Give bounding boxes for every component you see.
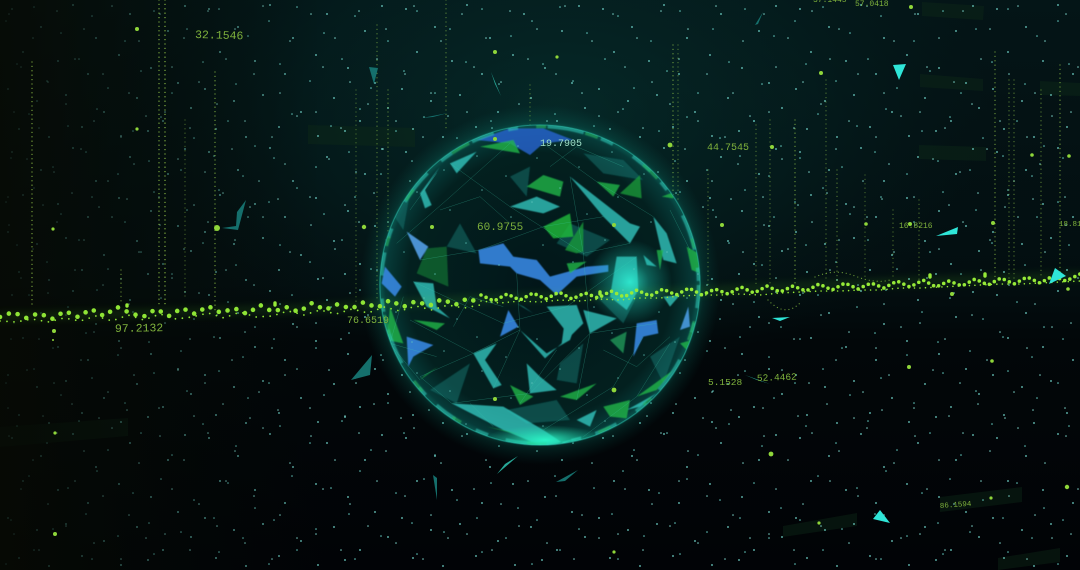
blue facets [382,128,690,367]
mesh lines [387,143,690,437]
medium teal shards [491,72,770,474]
stars over globe [395,145,699,427]
vertical dotted data columns [32,0,1060,310]
numeric labels: 97.2132 [115,322,163,336]
globe outer glow [360,105,720,465]
numeric labels: 16.8216 [899,222,933,231]
stream peak marker [127,274,985,306]
numeric labels: 52.4462 [757,372,797,384]
numeric labels: 19.7905 [540,139,582,150]
dim teal shards [222,12,763,500]
numeric labels: 86.1594 [940,501,972,511]
stream arc of small dots [768,272,890,310]
green facets [387,138,700,437]
numeric labels: 57.0418 [855,0,889,9]
globe polygons [380,125,700,455]
globe [360,105,720,465]
dim translucent facets [390,153,680,423]
numeric labels: 5.1528 [708,377,743,388]
waveform data stream [0,272,1080,322]
numeric labels: 32.1546 [195,29,244,43]
cyan facets [413,152,680,447]
numeric labels: 60.9755 [477,222,523,234]
stream glow [0,276,1080,317]
stream left dots [0,298,481,319]
floating triangles [222,12,1066,523]
hot spots [591,243,669,321]
globe rim [380,125,700,445]
globe body [379,124,701,446]
numeric labels: 44.7545 [707,143,749,154]
numeric labels: 76.6519 [347,316,389,327]
broken rim facets [381,126,699,444]
stream right dots [481,274,1080,301]
bright cyan triangles [772,64,1066,523]
